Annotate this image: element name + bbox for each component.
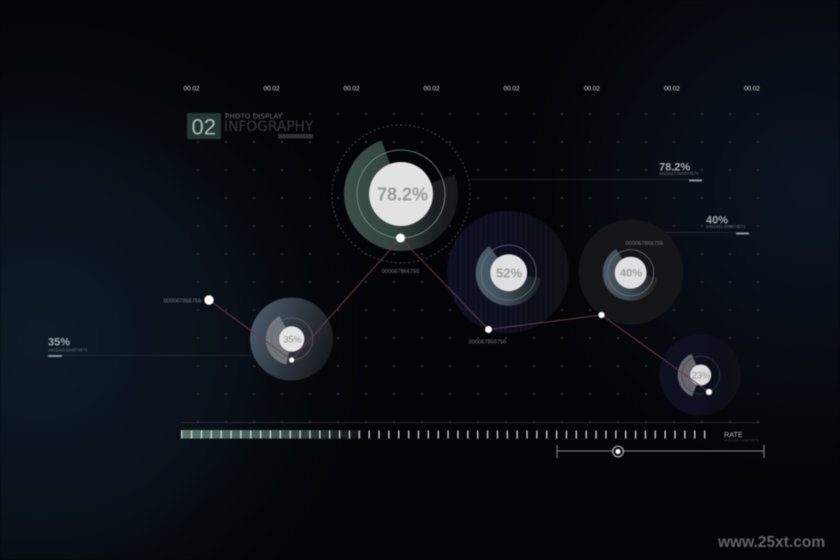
donut chart: 78.2%: 78.2% xyxy=(377,184,428,204)
donut chart: 40%: 40% xyxy=(620,268,642,280)
time axis labels: 00.02 xyxy=(504,86,520,92)
donut chart: 52%: 52% xyxy=(496,266,522,280)
title small line: PHOTO DISPLAY xyxy=(225,112,283,120)
dot grid xyxy=(184,100,772,428)
callout: 78.2% xyxy=(470,162,702,182)
donut chart: 78.2% xyxy=(332,125,470,263)
callout: 78.2%: 78.2% xyxy=(659,162,690,174)
title block xyxy=(187,112,314,140)
data point code labels: 000067866756 xyxy=(382,269,419,275)
data point code labels xyxy=(164,241,663,346)
time axis labels: 00.02 xyxy=(344,86,360,92)
slider knob xyxy=(613,446,623,457)
time axis labels: 00.02 xyxy=(664,86,680,92)
donut chart: 35%: 35% xyxy=(283,334,302,344)
title number badge xyxy=(187,113,221,139)
time axis labels: 00.02 xyxy=(584,86,600,92)
callout: 35%: 35% xyxy=(48,336,70,348)
donut chart: 23%: 23% xyxy=(692,370,710,380)
data point code labels: 000067866756 xyxy=(469,340,506,346)
data point code labels: 000067866756 xyxy=(164,298,201,304)
callout: 40% xyxy=(665,214,749,234)
donut chart: 52% xyxy=(447,211,569,333)
time axis labels: 00.02 xyxy=(744,86,760,92)
title main word: INFOGRAPHY xyxy=(224,119,314,135)
callout: 40%: 6463463.000874574 xyxy=(706,224,746,229)
time axis labels xyxy=(184,86,760,92)
time axis labels: 00.02 xyxy=(184,86,200,92)
title number: 02 xyxy=(192,114,216,140)
callout: 35% xyxy=(48,336,250,357)
line chart connecting data points xyxy=(204,234,712,395)
donut chart: 35% xyxy=(250,298,333,380)
data point markers xyxy=(204,234,712,395)
title hatch bar xyxy=(278,134,313,138)
callout: 78.2%: 6463463.000874574 xyxy=(659,171,699,176)
data point code labels: 000067866756 xyxy=(626,241,663,247)
scale highlighted band xyxy=(181,430,362,438)
scale ticks xyxy=(181,430,705,438)
donut chart: 23% xyxy=(660,334,740,416)
time axis labels: 00.02 xyxy=(264,86,280,92)
watermark: www.25xt.com xyxy=(717,534,825,551)
range slider xyxy=(557,445,764,458)
rate scale: 6463463.000874574 xyxy=(724,438,759,442)
rate scale xyxy=(181,422,760,442)
scale label: RATE xyxy=(724,430,743,439)
donut chart: 40% xyxy=(578,220,684,324)
callout: 40%: 40% xyxy=(706,214,728,226)
time axis labels: 00.02 xyxy=(424,86,440,92)
trend line xyxy=(209,238,709,392)
callout: 35%: 4463463.000874574 xyxy=(48,348,88,352)
